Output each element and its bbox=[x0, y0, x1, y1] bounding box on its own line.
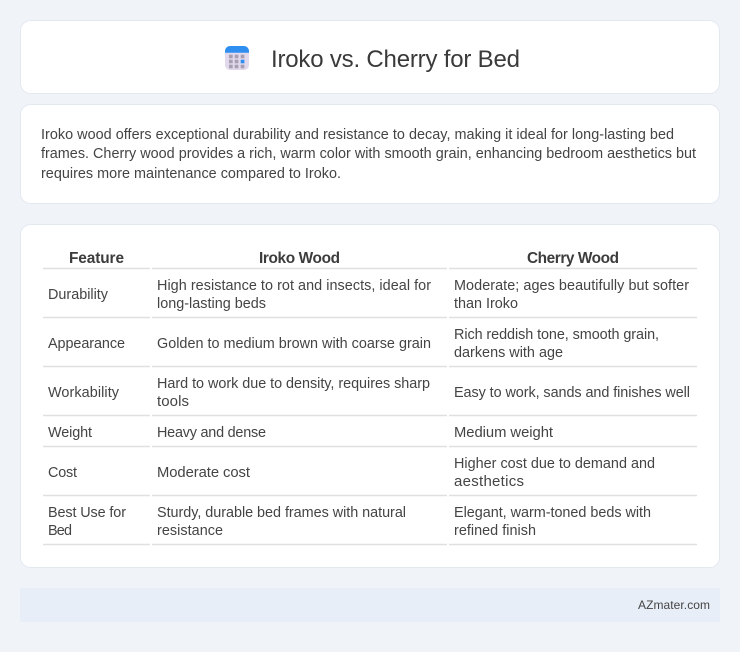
row: appearance: Appearance bbox=[48, 336, 125, 352]
row: appearance: darkens with age bbox=[454, 345, 563, 361]
row: weight: Heavy and dense bbox=[157, 425, 266, 441]
row: best use for bed bbox=[48, 505, 651, 539]
row: durability: long-lasting beds bbox=[157, 296, 266, 312]
row: weight bbox=[48, 425, 553, 441]
row: durability: Durability bbox=[48, 287, 109, 303]
row: durability: Moderate; ages beautifully but softer bbox=[454, 278, 689, 294]
row: cost: Moderate cost bbox=[157, 465, 250, 481]
footer bbox=[20, 588, 720, 622]
table header bbox=[69, 250, 619, 267]
row: cost: Cost bbox=[48, 465, 77, 481]
row: workability bbox=[48, 376, 690, 410]
row: weight: Medium weight bbox=[454, 425, 553, 441]
row: durability bbox=[48, 278, 689, 312]
row: appearance bbox=[48, 327, 659, 361]
row: best use for bed: Best Use for bbox=[48, 505, 126, 521]
row: appearance: Rich reddish tone, smooth grain, bbox=[454, 327, 659, 343]
row: appearance: Golden to medium brown with coarse grain bbox=[157, 336, 431, 352]
table header: Iroko Wood bbox=[259, 250, 340, 267]
row: cost bbox=[48, 456, 655, 490]
row: cost: aesthetics bbox=[454, 473, 524, 490]
row: workability: Hard to work due to density, requires sharp bbox=[157, 376, 430, 392]
text block: introduction bbox=[41, 127, 696, 182]
row: best use for bed: refined finish bbox=[454, 523, 536, 539]
row: workability: Workability bbox=[48, 385, 120, 401]
text block: introduction: Iroko wood offers exceptional durability and resistance to decay, making it ideal for long-lasting bed bbox=[41, 127, 674, 143]
title: Iroko vs. Cherry for Bed bbox=[271, 46, 520, 73]
row: best use for bed: Elegant, warm-toned beds with bbox=[454, 505, 651, 521]
row: weight: Weight bbox=[48, 425, 92, 441]
footer text: AZmater.com bbox=[638, 598, 710, 612]
row: best use for bed: Sturdy, durable bed frames with natural bbox=[157, 505, 406, 521]
panel: title card bbox=[20, 20, 720, 94]
text block: introduction: requires more maintenance compared to Iroko. bbox=[41, 166, 341, 182]
text block: introduction: frames. Cherry wood provides a rich, warm color with smooth grain, enhancing bedroom aesthetics but bbox=[41, 146, 696, 162]
row: workability: Easy to work, sands and finishes well bbox=[454, 385, 690, 401]
panel: comparison table bbox=[20, 224, 720, 568]
row: durability: High resistance to rot and insects, ideal for bbox=[157, 278, 431, 294]
row: best use for bed: resistance bbox=[157, 523, 223, 539]
panel: introduction bbox=[20, 104, 720, 204]
row: workability: tools bbox=[157, 393, 189, 410]
row: cost: Higher cost due to demand and bbox=[454, 456, 655, 472]
table header: Cherry Wood bbox=[527, 250, 619, 267]
row: best use for bed: Bed bbox=[48, 523, 72, 539]
table header: Feature bbox=[69, 250, 124, 267]
row: durability: than Iroko bbox=[454, 296, 518, 312]
icon: calendar bbox=[225, 46, 249, 70]
